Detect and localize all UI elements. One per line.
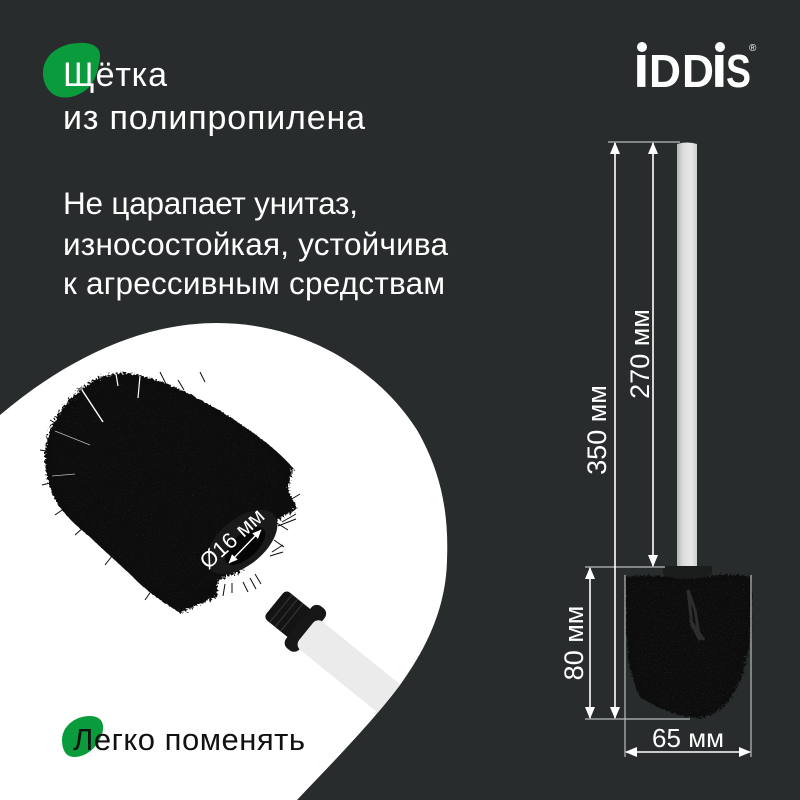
logo: iDDiS: S (726, 45, 751, 97)
black threaded part (265, 592, 310, 637)
logo: iDDiS: D (649, 45, 681, 97)
heading text: из полипропилена (63, 99, 365, 137)
panel: white circle with detail view (0, 323, 447, 800)
detail: connector ring with diameter (195, 497, 289, 587)
logo: iDDiS (637, 42, 756, 88)
logo: iDDiS: ® (749, 43, 757, 54)
label: 350 mm: 350 мм (582, 385, 612, 475)
arrow: 65 mm (626, 751, 750, 753)
icon: green accent blob (43, 43, 100, 98)
heading text: Щётка (63, 56, 167, 94)
logo: iDDiS: i (711, 33, 728, 100)
product: brush with handle (625, 142, 751, 718)
label: 80 mm: 80 мм (559, 606, 589, 680)
handle (677, 142, 697, 567)
text block: benefits: износостойкая, устойчива (63, 226, 448, 262)
black flange (284, 604, 326, 652)
caption text: Легко поменять (73, 722, 305, 757)
icon: green accent blob (62, 716, 103, 757)
label: 270 mm: 270 мм (625, 309, 655, 399)
arrow: diameter (229, 530, 261, 563)
arrow: 350 mm (614, 143, 616, 718)
text block: benefits: к агрессивным средствам (63, 265, 445, 301)
collar (663, 566, 712, 578)
heading: brush material (43, 43, 365, 137)
white tube (298, 620, 400, 713)
text block: benefits: Не царапает унитаз, (63, 185, 358, 221)
label: 65 mm: 65 мм (652, 723, 724, 753)
detail: handle with threaded end (265, 592, 400, 713)
arrow: 80 mm (589, 568, 591, 718)
brush head (625, 574, 751, 718)
label: diameter 16 mm: Ø16 мм (195, 503, 269, 574)
caption: easy to replace (62, 716, 305, 757)
detail: brush head (40, 372, 300, 613)
arrow: 270 mm (652, 143, 654, 566)
dimension lines (585, 142, 751, 757)
logo: iDDiS: D (682, 45, 714, 97)
logo: iDDiS: i (633, 33, 650, 100)
